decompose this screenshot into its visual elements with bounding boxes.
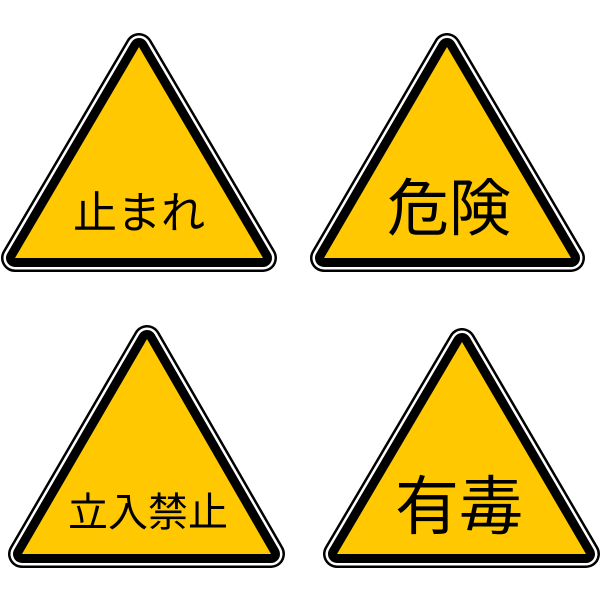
sign: 止まれ xyxy=(15,47,263,258)
text: 止まれ: 止まれ xyxy=(73,189,205,238)
sign: 有毒 xyxy=(337,342,586,554)
text: 有毒: 有毒 xyxy=(395,471,523,543)
text: 立入禁止: 立入禁止 xyxy=(68,491,228,535)
sign: 立入禁止 xyxy=(22,339,271,554)
text: 危険: 危険 xyxy=(387,175,511,244)
sign: 危険 xyxy=(324,47,571,258)
